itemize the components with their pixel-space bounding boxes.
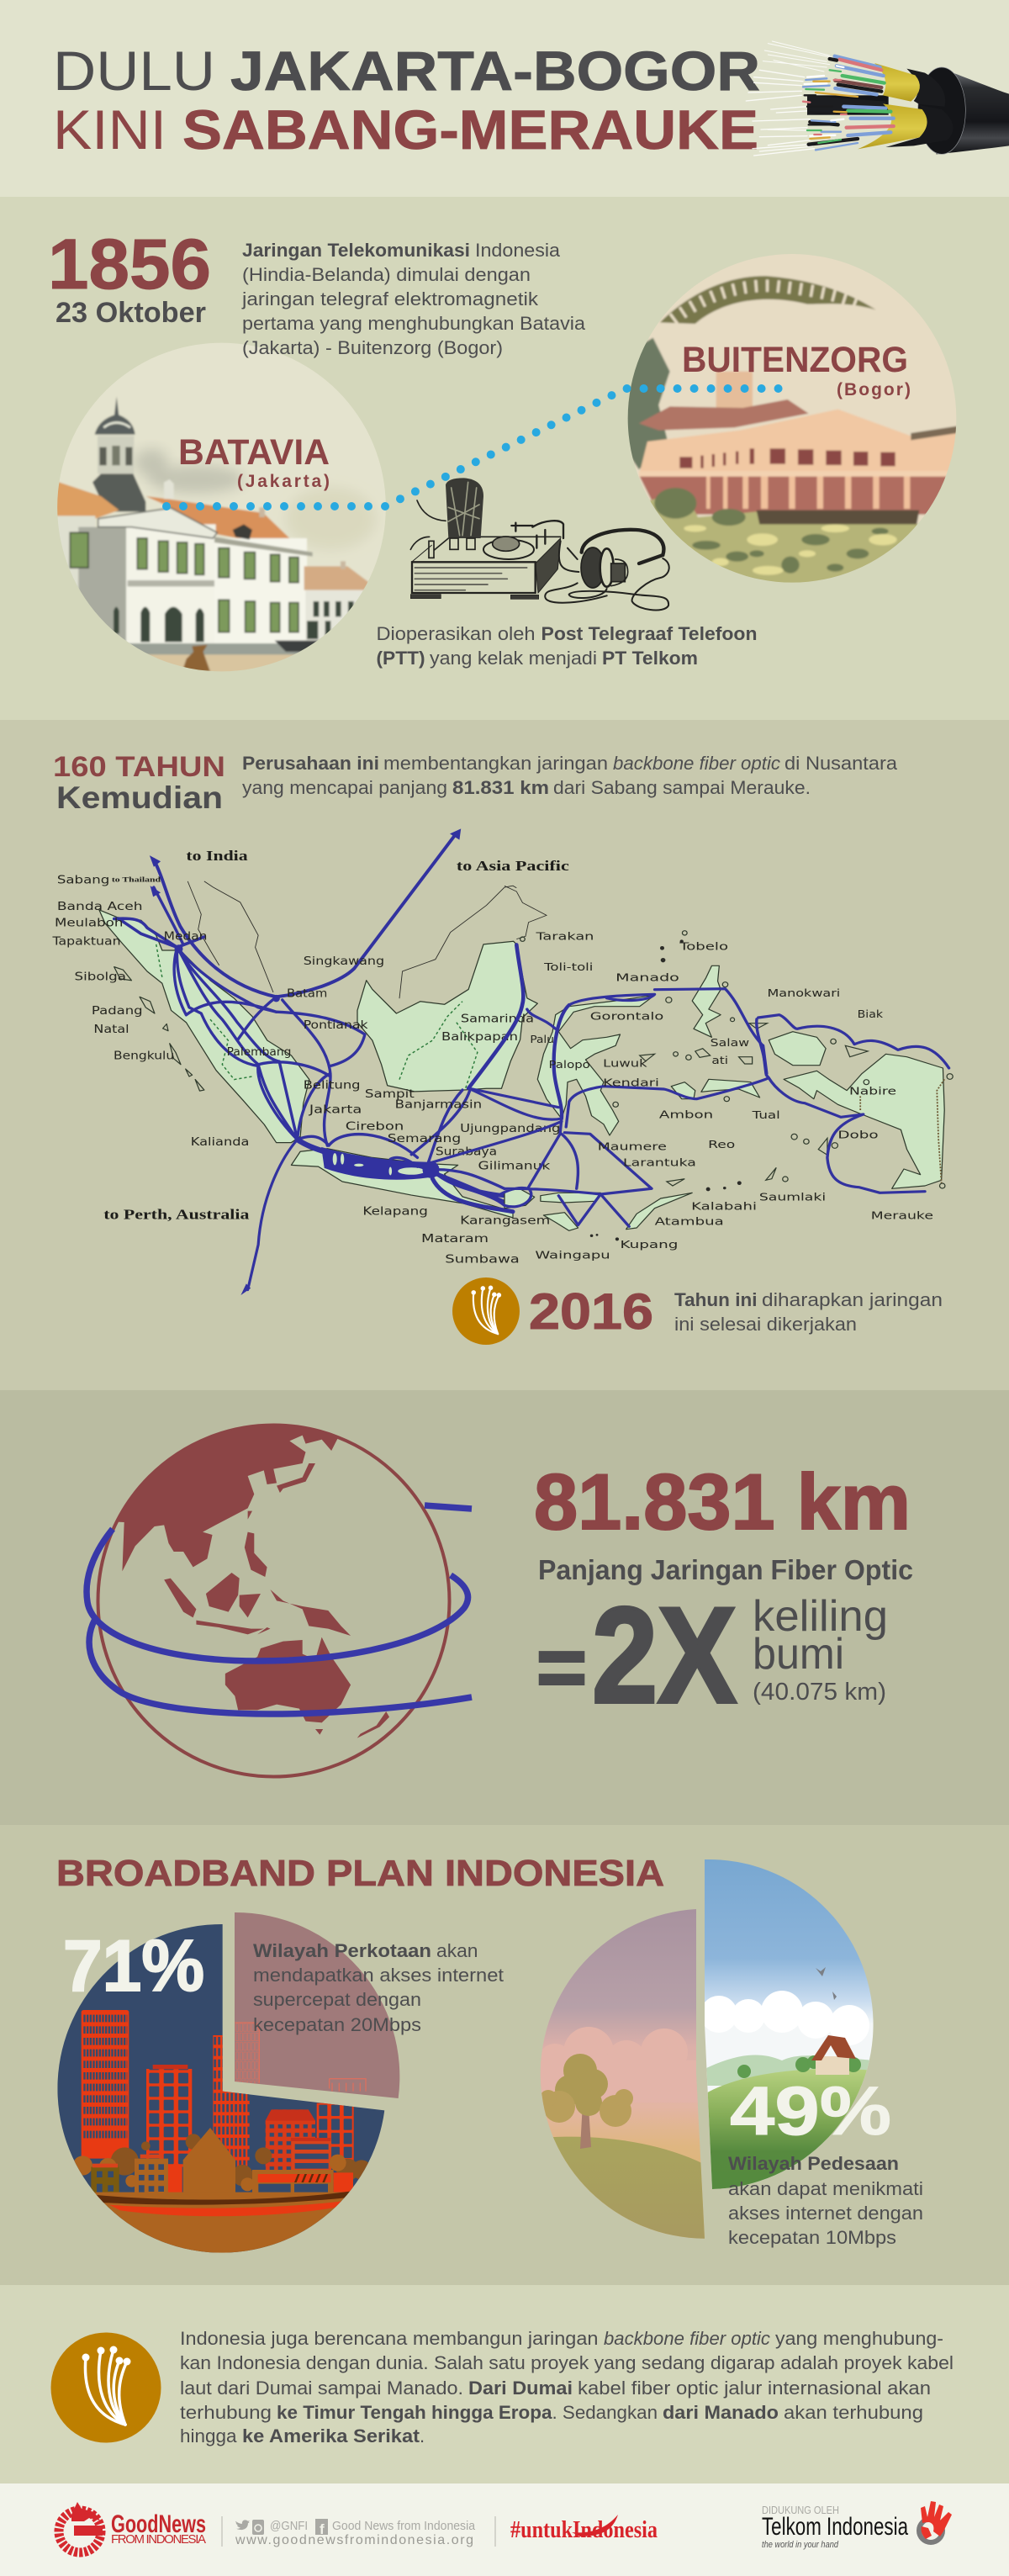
map: eastern islands and routes: Waingapu	[535, 1250, 610, 1262]
text: international connection: yang menghubung-	[775, 2328, 943, 2349]
text: urban internet	[253, 1940, 504, 2035]
map: western islands and routes: to Asia Pacific	[457, 858, 569, 874]
map: western islands and routes: Kalianda	[191, 1136, 249, 1149]
label: Buitenzorg: BUITENZORG	[682, 340, 908, 380]
map: western islands and routes: Singkawang	[304, 955, 384, 968]
heading: 160 tahun kemudian: Kemudian	[56, 780, 223, 815]
text: rural internet	[728, 2153, 923, 2248]
text: urban internet: mendapatkan akses internet	[253, 1965, 504, 1986]
text: international connection: kabel fiber optic jalur internasional akan	[578, 2378, 931, 2399]
text: international connection: dari Manado	[663, 2402, 779, 2423]
hashtag untuk Indonesia: #untukIndonesia	[510, 2517, 658, 2543]
map: eastern islands and routes: Luwuk	[603, 1058, 647, 1070]
divider	[494, 2516, 496, 2547]
logo: Telkom Indonesia: DIDUKUNG OLEH	[762, 2504, 839, 2516]
map: eastern islands and routes: Palu	[530, 1034, 554, 1046]
map: eastern islands and routes: Atambua	[655, 1216, 724, 1229]
map: western islands and routes: to Perth, Australia	[103, 1207, 249, 1223]
icon: globe	[96, 1423, 451, 1778]
logo: Telkom Indonesia: the world in your hand	[762, 2540, 839, 2550]
text: operated by PTT: yang kelak menjadi	[430, 648, 597, 669]
text: expected completion: diharapkan jaringan	[762, 1289, 943, 1310]
divider	[222, 2516, 223, 2547]
text: rural internet: Wilayah Pedesaan	[728, 2153, 899, 2174]
map: western islands and routes: Mataram	[421, 1233, 489, 1246]
map: eastern islands and routes: Kendari	[603, 1077, 659, 1090]
panel: footer	[0, 2483, 1009, 2576]
text: international connection: backbone fiber optic	[604, 2328, 770, 2349]
text: international connection: ke Timur Tengah hingga Eropa	[277, 2402, 552, 2423]
map: western islands and routes: Balikpapan	[441, 1031, 518, 1044]
text: urban internet: supercepat dengan	[253, 1989, 421, 2010]
text: international connection: .	[420, 2425, 425, 2446]
map: western islands and routes: Cirebon	[346, 1121, 404, 1134]
text: backbone description: di Nusantara	[784, 753, 898, 774]
map: western islands and routes: Sampit	[365, 1088, 415, 1101]
text: telecommunications intro: (Hindia-Belanda) dimulai dengan	[242, 264, 531, 285]
panel: broadband section	[0, 1825, 1009, 2285]
icon: blue fiber rings	[87, 1505, 472, 1714]
text: international connection	[180, 2328, 954, 2446]
text: backbone description: membentangkan jaringan	[383, 753, 608, 774]
social handles: www.goodnewsfromindonesia.org	[235, 2533, 473, 2547]
text: telecommunications intro: jaringan telegraf elektromagnetik	[241, 288, 539, 309]
map: western islands and routes: Sabang	[57, 874, 109, 886]
map: western islands and routes: Karangasem	[460, 1215, 550, 1228]
map: eastern islands and routes: Merauke	[871, 1210, 933, 1222]
map: western islands and routes: Kelapang	[362, 1205, 428, 1218]
text: backbone description: dari Sabang sampai Merauke.	[553, 777, 811, 798]
icon: fiber logo badge small	[452, 1277, 520, 1345]
social handles: Good News from Indonesia	[332, 2519, 476, 2533]
text: telecommunications intro: Indonesia	[475, 240, 561, 261]
label: Batavia: BATAVIA	[178, 432, 330, 473]
stat: 49 percent: 49%	[730, 2073, 891, 2150]
label: Buitenzorg: (Bogor)	[837, 380, 911, 399]
text: earth circumference: keliling	[753, 1592, 888, 1641]
map: eastern islands and routes: Larantuka	[623, 1157, 696, 1170]
map: eastern islands and routes: Tarakan	[535, 931, 594, 943]
map: western islands and routes: Meulaboh	[55, 917, 123, 929]
pie slice: city illustration	[53, 1920, 393, 2265]
panel: closing section	[0, 2285, 1009, 2483]
photo: Buitenzorg palace	[622, 248, 967, 593]
text: earth circumference: bumi	[753, 1630, 844, 1679]
pie slice: exploded wedge	[235, 1912, 399, 2098]
text: expected completion: Tahun ini	[674, 1289, 757, 1310]
text: earth circumference	[753, 1592, 888, 1706]
text: international connection: hingga	[180, 2425, 237, 2446]
text: operated by PTT: PT Telkom	[602, 648, 698, 669]
map: western islands and routes: Sibolga	[75, 971, 126, 984]
icon: telegraph apparatus with headphones	[410, 478, 669, 610]
logo: Telkom Indonesia: Telkom Indonesia	[762, 2513, 908, 2541]
map: western islands and routes: Belitung	[304, 1079, 361, 1092]
map: eastern islands and routes: Maumere	[598, 1141, 667, 1153]
map: eastern islands and routes: Tual	[751, 1109, 780, 1122]
map: western islands and routes: Gilimanuk	[478, 1161, 551, 1173]
logo: GoodNews from Indonesia: GoodNews	[111, 2510, 206, 2538]
heading: 160 tahun kemudian: 160 TAHUN	[53, 751, 225, 783]
pie slice: faded countryside	[540, 1909, 705, 2239]
stat: equals two times	[536, 1579, 737, 1732]
stat: 81.831 km: 81.831 km	[534, 1457, 911, 1546]
map: western islands and routes: Banjarmasin	[395, 1098, 482, 1111]
map: eastern islands and routes: Palopo	[548, 1059, 590, 1071]
text: telecommunications intro: pertama yang menghubungkan Batavia	[242, 313, 586, 334]
label: Batavia	[178, 432, 330, 491]
text: operated by PTT: Post Telegraaf Telefoon	[541, 623, 757, 644]
title: DULU	[53, 40, 215, 102]
text: expected completion	[674, 1289, 943, 1335]
panel: fiber length section	[0, 1390, 1009, 1825]
map: western islands and routes: Padang	[92, 1005, 143, 1018]
text: urban internet: kecepatan 20Mbps	[253, 2014, 421, 2035]
map: eastern islands and routes: Manokwari	[767, 987, 840, 1000]
map: eastern islands and routes: Dobo	[837, 1129, 879, 1141]
map: western islands and routes: Samarinda	[461, 1013, 534, 1026]
title: KINI	[53, 98, 166, 161]
text: backbone description: 81.831 km	[452, 777, 549, 798]
text: earth circumference: (40.075 km)	[753, 1679, 886, 1706]
map: eastern islands and routes: Nabire	[849, 1086, 896, 1098]
heading: 23 Oktober: 23 Oktober	[55, 297, 206, 329]
text: rural internet: kecepatan 10Mbps	[728, 2227, 896, 2248]
map: eastern islands and routes: Manado	[615, 972, 679, 985]
icon: dotted telegraph line	[166, 389, 795, 506]
map: western islands and routes: Tapaktuan	[51, 936, 121, 949]
logo: GoodNews from Indonesia: FROM INDONESIA	[111, 2532, 206, 2547]
map: western islands and routes: Jakarta	[309, 1104, 362, 1117]
icon: fiber optic cable	[746, 41, 1009, 156]
text: international connection: laut dari Dumai sampai Manado.	[180, 2378, 463, 2399]
map: eastern islands and routes: Tobelo	[679, 941, 728, 953]
map: eastern islands and routes: Ambon	[659, 1109, 713, 1121]
map: eastern islands and routes	[428, 886, 953, 1262]
social handles: @GNFI	[270, 2519, 308, 2533]
text: international connection: ke Amerika Serikat	[242, 2425, 420, 2446]
chart: urban 71 percent pie	[53, 1912, 399, 2265]
map: eastern islands and routes: Kalabahi	[691, 1201, 757, 1213]
logo: Telkom Indonesia	[762, 2501, 952, 2550]
text: international connection: akan terhubung	[784, 2402, 923, 2423]
map: eastern islands and routes: ati	[711, 1055, 728, 1067]
text: operated by PTT: Dioperasikan oleh	[377, 623, 535, 644]
text: backbone description: yang mencapai panjang	[242, 777, 447, 798]
text: backbone description: Perusahaan ini	[242, 753, 379, 774]
map: western islands and routes: Batam	[287, 987, 327, 1000]
text: operated by PTT: (PTT)	[377, 648, 425, 669]
map: western islands and routes: Pontianak	[304, 1019, 368, 1032]
map: western islands and routes	[51, 828, 569, 1295]
text: rural internet: akses internet dengan	[728, 2203, 923, 2224]
heading: 160 tahun kemudian	[53, 751, 225, 815]
stat: 71 percent: 71%	[63, 1926, 204, 2007]
map: western islands and routes: Medan	[164, 930, 207, 943]
map: eastern islands and routes: Salaw	[711, 1037, 749, 1050]
map: eastern islands and routes: Gorontalo	[590, 1011, 664, 1024]
heading: 1856: 1856	[48, 225, 211, 304]
label: Buitenzorg	[682, 340, 911, 399]
title: SABANG-MERAUKE	[182, 98, 758, 161]
text: international connection: terhubung	[180, 2402, 272, 2423]
text: fiber network length: Panjang Jaringan Fiber Optic	[538, 1554, 913, 1585]
text: telecommunications intro	[241, 240, 586, 358]
text: telecommunications intro: Jaringan Telekomunikasi	[242, 240, 470, 261]
social handles	[235, 2519, 476, 2547]
map: western islands and routes: to India	[186, 848, 248, 864]
map: western islands and routes: Ujungpandang	[460, 1123, 560, 1135]
logo: GoodNews from Indonesia	[59, 2502, 206, 2552]
panel: 1856 section	[0, 197, 1009, 720]
text: international connection: Dari Dumai	[468, 2378, 573, 2399]
stat: equals two times: =	[536, 1621, 587, 1715]
map: eastern islands and routes: Kupang	[620, 1239, 678, 1251]
map: eastern islands and routes: Reo	[708, 1139, 736, 1151]
text: international connection: . Sedangkan	[552, 2402, 658, 2423]
text: backbone description	[242, 753, 898, 798]
map: western islands and routes: to Thailand	[112, 875, 161, 884]
map: western islands and routes: Semarang	[388, 1133, 461, 1145]
icon: fiber logo badge large	[50, 2333, 161, 2442]
heading: broadband plan: BROADBAND PLAN INDONESIA	[56, 1853, 664, 1894]
map: eastern islands and routes: Saumlaki	[759, 1192, 826, 1203]
text: operated by PTT	[377, 623, 757, 669]
title: JAKARTA-BOGOR	[230, 40, 760, 102]
map: western islands and routes: Sumbawa	[445, 1253, 520, 1266]
map: western islands and routes: Bengkulu	[114, 1050, 174, 1063]
photo: Batavia town hall	[50, 336, 395, 681]
pie slice: countryside sky and hill	[698, 1854, 874, 2195]
map: western islands and routes: Natal	[93, 1024, 129, 1036]
stat: equals two times: 2X	[592, 1579, 737, 1732]
map: western islands and routes: Surabaya	[436, 1146, 497, 1159]
map: western islands and routes: Palembang	[227, 1046, 291, 1059]
map: Indonesia backbone network	[51, 828, 953, 1295]
text: urban internet: Wilayah Perkotaan	[253, 1940, 431, 1961]
map: eastern islands and routes: Biak	[858, 1008, 884, 1021]
text: international connection: kan Indonesia dengan dunia. Salah satu proyek yang sedang digarap adalah proyek kabel	[180, 2352, 954, 2373]
text: telecommunications intro: (Jakarta) - Buitenzorg (Bogor)	[242, 337, 503, 358]
panel: 160 tahun section	[0, 720, 1009, 1390]
social handles: f	[320, 2521, 325, 2537]
text: rural internet: akan dapat menikmati	[728, 2178, 923, 2199]
chart: rural 49 percent pie	[521, 1854, 874, 2245]
map: western islands and routes: Banda Aceh	[57, 901, 143, 913]
text: international connection: Indonesia juga berencana membangun jaringan	[180, 2328, 599, 2349]
label: Batavia: (Jakarta)	[237, 472, 330, 491]
panel: header band	[0, 0, 1009, 197]
title	[53, 40, 760, 161]
heading: 2016: 2016	[529, 1283, 653, 1340]
text: urban internet: akan	[436, 1940, 478, 1961]
map: eastern islands and routes: Toli-toli	[543, 961, 593, 974]
globe with fiber rings	[65, 1413, 472, 1776]
text: expected completion: ini selesai dikerjakan	[674, 1314, 857, 1335]
text: backbone description: backbone fiber optic	[613, 753, 780, 774]
